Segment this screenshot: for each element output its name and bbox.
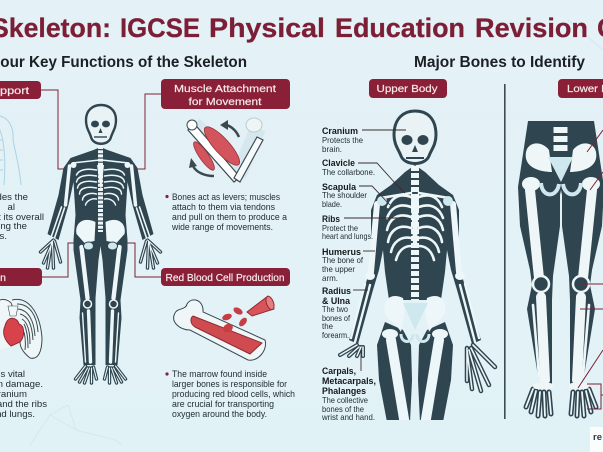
text: support xyxy=(0,192,44,242)
watermark badge: re xyxy=(593,432,602,443)
label: ribs: Protect the xyxy=(322,224,358,233)
title: IGCSE xyxy=(120,13,200,43)
text: red blood cell: larger bones is responsible for xyxy=(172,379,288,390)
skeleton: lower body xyxy=(518,121,603,416)
label: radius and ulna: & Ulna xyxy=(322,295,351,306)
label: hand bones: The collective xyxy=(322,396,368,405)
connector lines xyxy=(41,90,161,277)
label: scapula: Scapula xyxy=(322,181,357,192)
label: cranium: brain. xyxy=(322,145,342,154)
label: hand bones: Metacarpals, xyxy=(322,375,376,386)
label: scapula: blade. xyxy=(322,200,342,209)
text: protection xyxy=(0,369,47,420)
label: radius and ulna: forearm. xyxy=(322,331,349,340)
label: cranium: Cranium xyxy=(322,125,358,136)
label: radius and ulna xyxy=(322,285,368,340)
pill: muscle attachment: for Movement xyxy=(188,96,262,108)
label: humerus: Humerus xyxy=(322,246,361,257)
label: radius and ulna: the xyxy=(322,322,333,331)
illustration: bone with marrow xyxy=(174,295,276,360)
label: radius and ulna: bones of xyxy=(322,314,351,323)
illustration: ribcage and heart xyxy=(0,298,42,358)
label: radius and ulna: The two xyxy=(322,305,348,314)
pill: support xyxy=(0,81,41,99)
text: muscle: attach to them via tendons xyxy=(172,202,275,213)
text: support: al xyxy=(8,202,15,213)
label: ribs: Ribs xyxy=(322,213,340,224)
illustration: torso outline xyxy=(0,116,21,185)
pill: upper body: Upper Body xyxy=(376,83,438,95)
label: scapula: The shoulder xyxy=(322,191,367,200)
label: humerus: arm. xyxy=(322,274,338,283)
pill: red blood cell production xyxy=(161,268,290,286)
label: hand bones: wrist and hand. xyxy=(321,413,375,422)
pill: muscle attachment: Muscle Attachment xyxy=(174,83,276,95)
label: clavicle: The collarbone. xyxy=(322,168,375,177)
label: clavicle: Clavicle xyxy=(322,157,355,168)
label: hand bones: bones of the xyxy=(322,405,364,414)
label: humerus: The bone of xyxy=(322,256,364,265)
text: muscle: Bones act as levers; muscles xyxy=(172,192,280,203)
label: cranium: Protects the xyxy=(322,136,363,145)
title: Revision xyxy=(475,13,588,43)
text: red blood cell: The marrow found inside xyxy=(172,369,267,380)
label: radius and ulna: Radius xyxy=(322,285,351,296)
label: cranium xyxy=(322,125,406,154)
pill: lower body xyxy=(558,79,603,98)
skeleton: upper body xyxy=(340,111,495,425)
label: hand bones: Carpals, xyxy=(322,365,356,376)
label: humerus: the upper xyxy=(322,265,355,274)
text: red blood cell: oxygen around the body. xyxy=(172,409,267,420)
text: muscle: wide range of movements. xyxy=(171,222,273,233)
pill: red blood cell production: Red Blood Cell Production xyxy=(166,272,285,284)
pill: upper body xyxy=(369,79,447,98)
skeleton: full body centre xyxy=(40,105,160,383)
pill: muscle attachment xyxy=(161,79,290,109)
text: muscle: and pull on them to produce a xyxy=(172,212,288,223)
text: red blood cell xyxy=(165,369,295,420)
label: clavicle xyxy=(322,157,405,193)
title: Education xyxy=(335,13,465,43)
heading: major bones: Major Bones to Identify xyxy=(414,54,585,71)
label: humerus xyxy=(322,246,375,283)
pill: support: pport xyxy=(0,85,29,97)
pill: protection: n xyxy=(0,272,6,284)
pill: protection xyxy=(0,268,42,286)
label: hand bones: Phalanges xyxy=(322,385,366,396)
label: ribs xyxy=(322,213,405,241)
label: ribs: heart and lungs. xyxy=(322,232,373,241)
label: hand bones xyxy=(321,350,376,422)
watermark badge xyxy=(590,427,603,452)
text: red blood cell: are crucial for transporting xyxy=(172,399,274,410)
divider xyxy=(504,84,506,419)
illustration: arm muscle xyxy=(187,118,263,182)
title: Physical xyxy=(209,13,325,43)
text: muscle xyxy=(165,192,288,233)
text: red blood cell: producing red blood cells, which xyxy=(172,389,295,400)
labels: upper body bones xyxy=(321,125,406,422)
label: scapula xyxy=(322,181,390,209)
title xyxy=(0,13,603,43)
